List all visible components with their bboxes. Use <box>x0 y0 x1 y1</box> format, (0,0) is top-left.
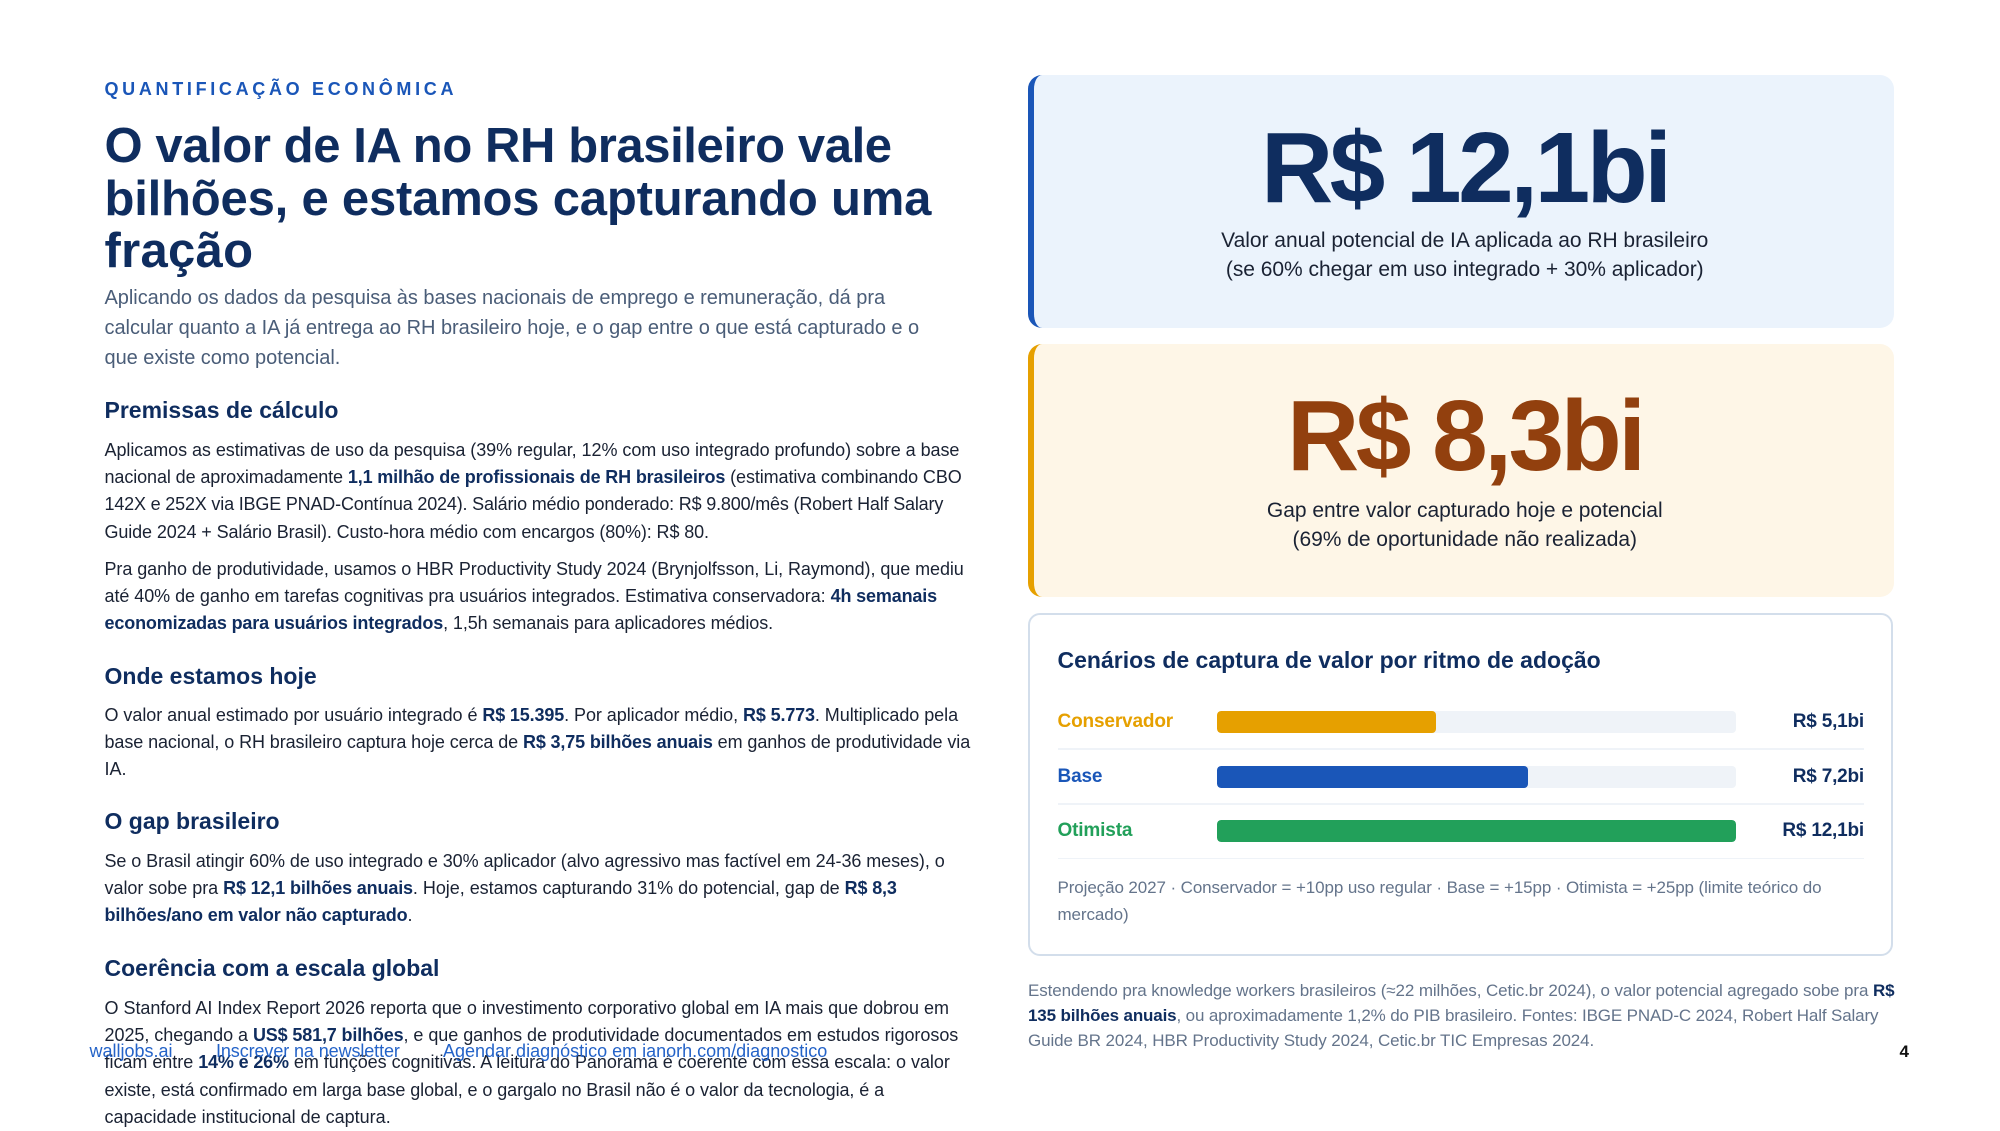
paragraph: onde estamos hoje: O valor anual estimado por usuário integrado é R$ 15.395. Por aplicador médio, R$ 5.773. Multiplicado pela <box>104 705 958 725</box>
title: O valor de IA no RH brasileiro vale <box>104 119 892 173</box>
paragraph: premissas 2: até 40% de ganho em tarefas cognitivas pra usuários integrados. Estimativa conservadora: 4h semanais <box>104 586 937 606</box>
paragraph: premissas 2 <box>104 559 964 633</box>
source note: Estendendo pra knowledge workers brasileiros (≈22 milhões, Cetic.br 2024), o valor potencial agregado sobe pra R$ <box>1028 980 1894 1000</box>
paragraph: o gap brasileiro <box>104 851 945 925</box>
paragraph: o gap brasileiro: bilhões/ano em valor não capturado. <box>104 905 412 925</box>
eyebrow: QUANTIFICAÇÃO ECONÔMICA <box>104 79 457 99</box>
chart note <box>1058 878 1821 924</box>
paragraph: coerência: existe, está confirmado em larga base global, e o gargalo no Brasil não é o valor da tecnologia, é a <box>104 1080 884 1100</box>
bar row: base <box>1058 766 1864 788</box>
big number: potencial: R$ 12,1bi <box>1261 112 1669 224</box>
caption: gap <box>1267 499 1663 550</box>
paragraph: o gap brasileiro: valor sobe pra R$ 12,1 bilhões anuais. Hoje, estamos capturando 31% do potencial, gap de R$ 8,3 <box>104 878 897 898</box>
chart note: mercado) <box>1058 905 1129 924</box>
caption: potencial: (se 60% chegar em uso integrado + 30% aplicador) <box>1226 258 1704 280</box>
title: fração <box>104 224 253 278</box>
text: Conservador <box>1058 711 1173 732</box>
footer links: Agendar diagnóstico em ianorh.com/diagnostico <box>443 1041 827 1061</box>
title: bilhões, e estamos capturando uma <box>104 172 931 226</box>
source note: Guide BR 2024, HBR Productivity Study 2024, Cetic.br TIC Empresas 2024. <box>1028 1030 1594 1050</box>
chart heading: Cenários de captura de valor por ritmo de adoção <box>1058 646 1601 672</box>
paragraph: onde estamos hoje <box>104 705 970 779</box>
heading: o gap brasileiro: O gap brasileiro <box>104 808 280 834</box>
paragraph: coerência: O Stanford AI Index Report 2026 reporta que o investimento corporativo global em IA mais que dobrou em <box>104 998 949 1018</box>
source note <box>1028 980 1894 1050</box>
heading: premissas: Premissas de cálculo <box>104 397 338 423</box>
panel: gap <box>1028 344 1894 597</box>
source note: 135 bilhões anuais, ou aproximadamente 1,2% do PIB brasileiro. Fontes: IBGE PNAD-C 2024, Robert Half Salary <box>1028 1006 1878 1024</box>
caption: gap: Gap entre valor capturado hoje e potencial <box>1267 499 1663 522</box>
chart note: Projeção 2027 · Conservador = +10pp uso regular · Base = +15pp · Otimista = +25pp (limite teórico do <box>1058 878 1821 897</box>
paragraph: coerência: 2025, chegando a US$ 581,7 bilhões, e que ganhos de produtividade documentados em estudos rigorosos <box>104 1025 958 1045</box>
paragraph: premissas 2: economizadas para usuários integrados, 1,5h semanais para aplicadores médios. <box>104 613 773 633</box>
paragraph: premissas 1: Aplicamos as estimativas de uso da pesquisa (39% regular, 12% com uso integrado profundo) sobre a base <box>104 440 959 460</box>
caption: gap: (69% de oportunidade não realizada) <box>1292 528 1637 550</box>
page number: 4 <box>1900 1042 1909 1061</box>
subtitle: Aplicando os dados da pesquisa às bases nacionais de emprego e remuneração, dá pra <box>104 287 885 309</box>
paragraph: premissas 1: 142X e 252X via IBGE PNAD-Contínua 2024). Salário médio ponderado: R$ 9.800/mês (Robert Half Salary <box>104 494 943 514</box>
paragraph: coerência <box>104 998 958 1127</box>
paragraph: premissas 1: nacional de aproximadamente 1,1 milhão de profissionais de RH brasileiros (estimativa combinando CBO <box>104 467 962 487</box>
text: R$ 12,1bi <box>1782 820 1864 841</box>
paragraph: premissas 1: Guide 2024 + Salário Brasil). Custo-hora médio com encargos (80%): R$ 80. <box>104 522 709 542</box>
paragraph: o gap brasileiro: Se o Brasil atingir 60% de uso integrado e 30% aplicador (alvo agressivo mas factível em 24-36 meses), o <box>104 851 945 871</box>
paragraph: coerência: capacidade institucional de captura. <box>104 1107 391 1127</box>
text: Otimista <box>1058 820 1132 841</box>
text: R$ 5,1bi <box>1793 711 1864 732</box>
heading: onde estamos hoje: Onde estamos hoje <box>104 663 317 689</box>
paragraph: onde estamos hoje: IA. <box>104 759 127 779</box>
bar row: conservador <box>1058 711 1864 733</box>
text: Base <box>1058 766 1102 787</box>
footer links: Inscrever na newsletter <box>216 1041 400 1061</box>
panel: cenários <box>1028 612 1893 956</box>
paragraph: premissas 2: Pra ganho de produtividade, usamos o HBR Productivity Study 2024 (Brynjolfsson, Li, Raymond), que mediu <box>104 559 964 579</box>
title <box>104 119 932 278</box>
caption: potencial <box>1221 229 1708 280</box>
paragraph: onde estamos hoje: base nacional, o RH brasileiro captura hoje cerca de R$ 3,75 bilhões anuais em ganhos de produtividade via <box>104 732 970 752</box>
big number: gap: R$ 8,3bi <box>1287 380 1642 492</box>
paragraph: premissas 1 <box>104 440 962 542</box>
heading: coerência: Coerência com a escala global <box>104 955 439 981</box>
subtitle: que existe como potencial. <box>104 347 340 369</box>
caption: potencial: Valor anual potencial de IA aplicada ao RH brasileiro <box>1221 229 1708 252</box>
footer links: walljobs.ai <box>90 1041 173 1061</box>
paragraph: coerência: ficam entre 14% e 26% em funções cognitivas. A leitura do Panorama é coerente com essa escala: o valor <box>104 1052 950 1072</box>
text: R$ 7,2bi <box>1793 766 1864 787</box>
footer links <box>90 1041 827 1061</box>
subtitle: calcular quanto a IA já entrega ao RH brasileiro hoje, e o gap entre o que está capturado e o <box>104 317 919 339</box>
bar row: otimista <box>1058 820 1864 842</box>
subtitle <box>104 287 919 369</box>
panel: potencial <box>1028 75 1894 328</box>
